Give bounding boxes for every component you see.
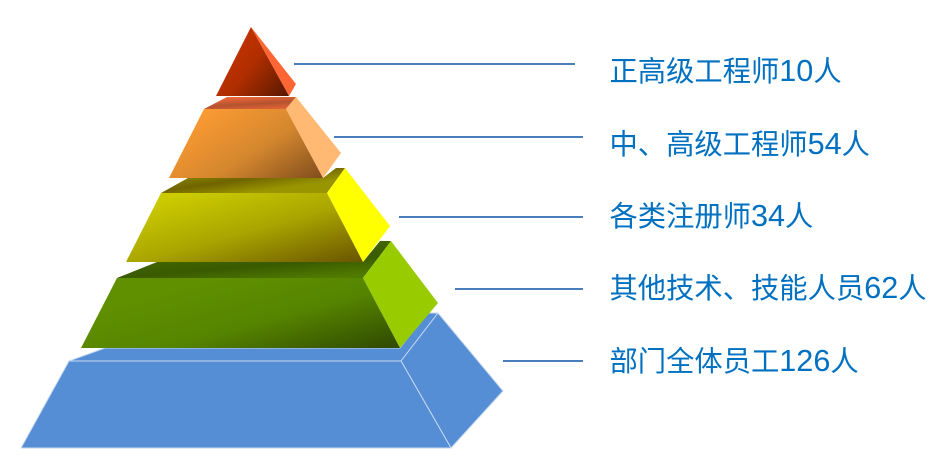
tier 2: mid and senior engineers bbox=[169, 97, 341, 178]
label: senior engineers: 正高级工程师10人 bbox=[610, 54, 842, 88]
tier 5: all staff bbox=[21, 313, 503, 448]
label: mid and senior engineers: 中、高级工程师54人 bbox=[610, 127, 870, 161]
label: all staff: 部门全体员工126人 bbox=[610, 344, 859, 378]
label: registered engineers: 各类注册师34人 bbox=[610, 199, 813, 233]
tier 1: professor-level engineers bbox=[216, 27, 296, 96]
leader line 3 bbox=[399, 216, 583, 218]
leader line 1 bbox=[294, 63, 575, 65]
leader line 4 bbox=[455, 288, 583, 290]
tier 3: registered engineers bbox=[126, 168, 390, 262]
label: other technical staff: 其他技术、技能人员62人 bbox=[610, 271, 927, 305]
leader line 2 bbox=[334, 136, 583, 138]
leader line 5 bbox=[503, 360, 583, 362]
tier 4: other technical staff bbox=[81, 241, 438, 348]
